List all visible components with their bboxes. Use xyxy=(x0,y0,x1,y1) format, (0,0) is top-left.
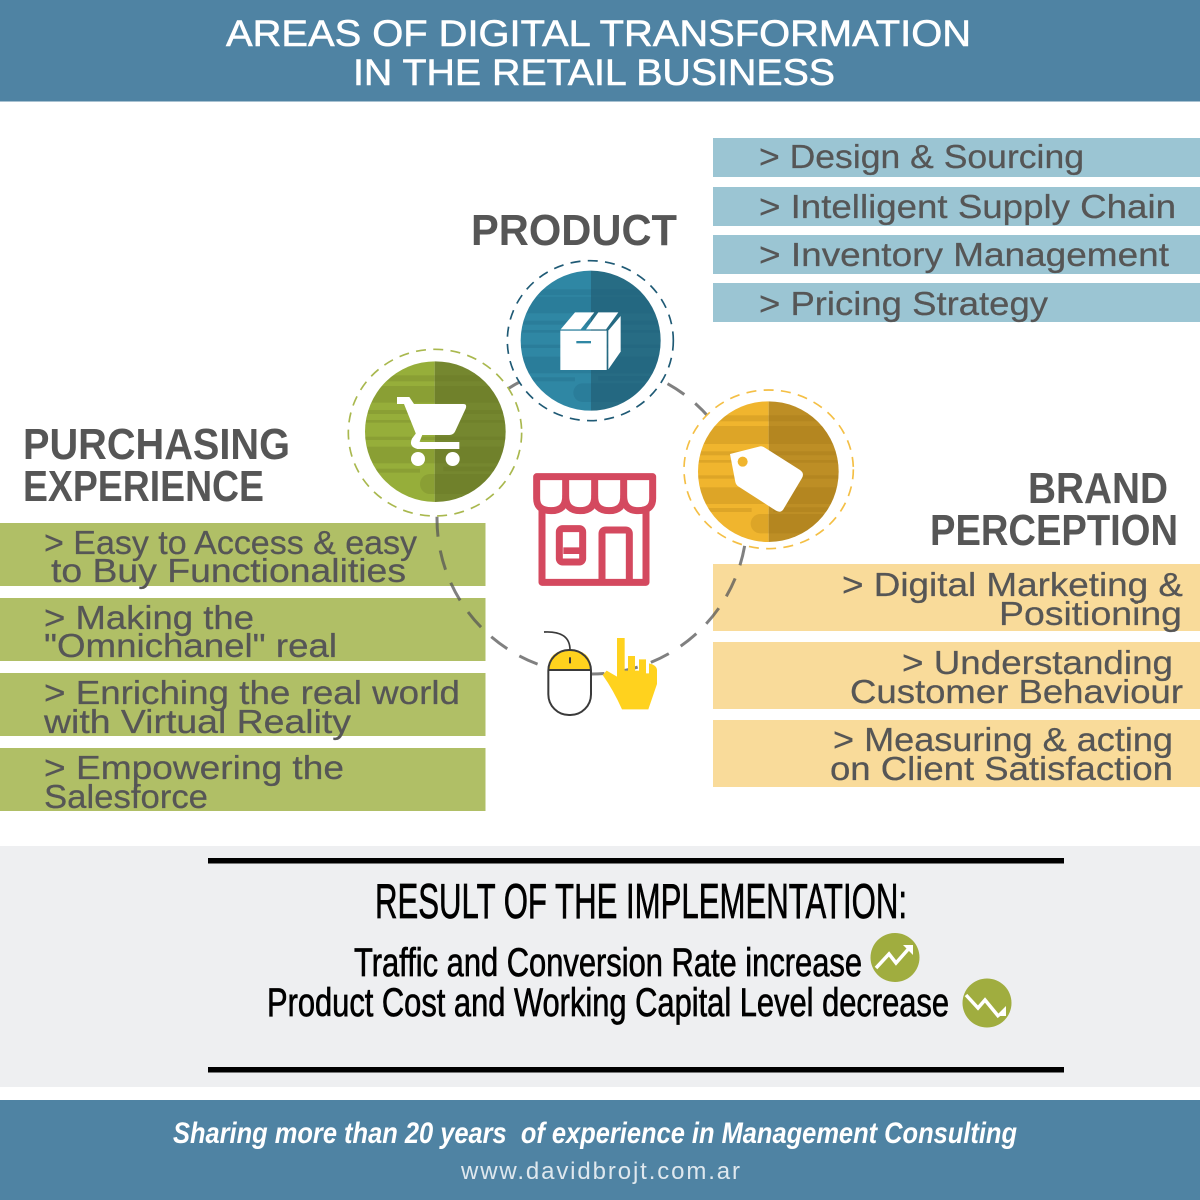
heading: purchasing experience xyxy=(23,420,290,511)
dashed connector ring xyxy=(437,364,747,674)
icon: store xyxy=(537,477,653,582)
footer banner: Sharing more than 20 years of experience in Management Consulting xyxy=(173,1117,1017,1150)
heading: product: PRODUCT xyxy=(471,206,677,255)
panel: purchasing experience list: > Easy to Access & easy xyxy=(44,524,418,561)
panel: brand perception list: > Understanding xyxy=(902,644,1173,681)
icon: brand circle xyxy=(684,390,853,549)
panel: brand perception list xyxy=(713,564,1200,787)
panel: product list xyxy=(713,138,1200,322)
panel: purchasing experience list: > Making the xyxy=(44,599,254,636)
panel: brand perception list: on Client Satisfaction xyxy=(830,750,1173,787)
result line: decrease: Product Cost and Working Capital Level decrease xyxy=(267,981,949,1025)
icon: product circle xyxy=(507,261,673,421)
heading: brand perception: BRAND xyxy=(1028,464,1168,513)
panel: product list: > Pricing Strategy xyxy=(759,285,1049,322)
footer banner xyxy=(0,1100,1200,1200)
panel: purchasing experience list: Salesforce xyxy=(44,778,208,815)
panel: product list: > Design & Sourcing xyxy=(759,138,1084,175)
header banner xyxy=(0,0,1200,102)
panel: brand perception list: > Measuring & acting xyxy=(833,721,1173,758)
panel: purchasing experience list: with Virtual Reality xyxy=(43,703,352,740)
icon: trend up xyxy=(870,933,920,982)
icon: trend down xyxy=(962,978,1012,1028)
icon: pointing hand xyxy=(603,638,657,709)
panel: brand perception list: Positioning xyxy=(999,595,1182,632)
icon: mouse xyxy=(544,632,591,715)
panel: brand perception list: > Digital Marketing & xyxy=(842,566,1183,603)
icon: purchasing circle xyxy=(348,349,522,516)
panel: brand perception list: Customer Behaviour xyxy=(850,673,1183,710)
panel: purchasing experience list: "Omnichanel" real xyxy=(44,627,337,664)
panel: result of the implementation xyxy=(0,846,1200,1087)
header banner: IN THE RETAIL BUSINESS xyxy=(353,52,835,93)
result line: increase: Traffic and Conversion Rate increase xyxy=(354,941,862,985)
panel: purchasing experience list: > Empowering the xyxy=(44,749,344,786)
footer banner: www.davidbrojt.com.ar xyxy=(460,1158,740,1185)
panel: product list: > Inventory Management xyxy=(759,236,1169,273)
panel: purchasing experience list: to Buy Functionalities xyxy=(51,552,406,589)
panel: product list: > Intelligent Supply Chain xyxy=(759,188,1176,225)
heading: brand perception xyxy=(930,464,1178,555)
panel: purchasing experience list xyxy=(0,523,486,815)
panel: purchasing experience list: > Enriching the real world xyxy=(44,674,460,711)
heading: purchasing experience: PURCHASING xyxy=(23,420,290,469)
result heading: RESULT OF THE IMPLEMENTATION: xyxy=(375,875,907,929)
header banner: AREAS OF DIGITAL TRANSFORMATION xyxy=(226,13,971,54)
heading: purchasing experience: EXPERIENCE xyxy=(23,462,264,511)
